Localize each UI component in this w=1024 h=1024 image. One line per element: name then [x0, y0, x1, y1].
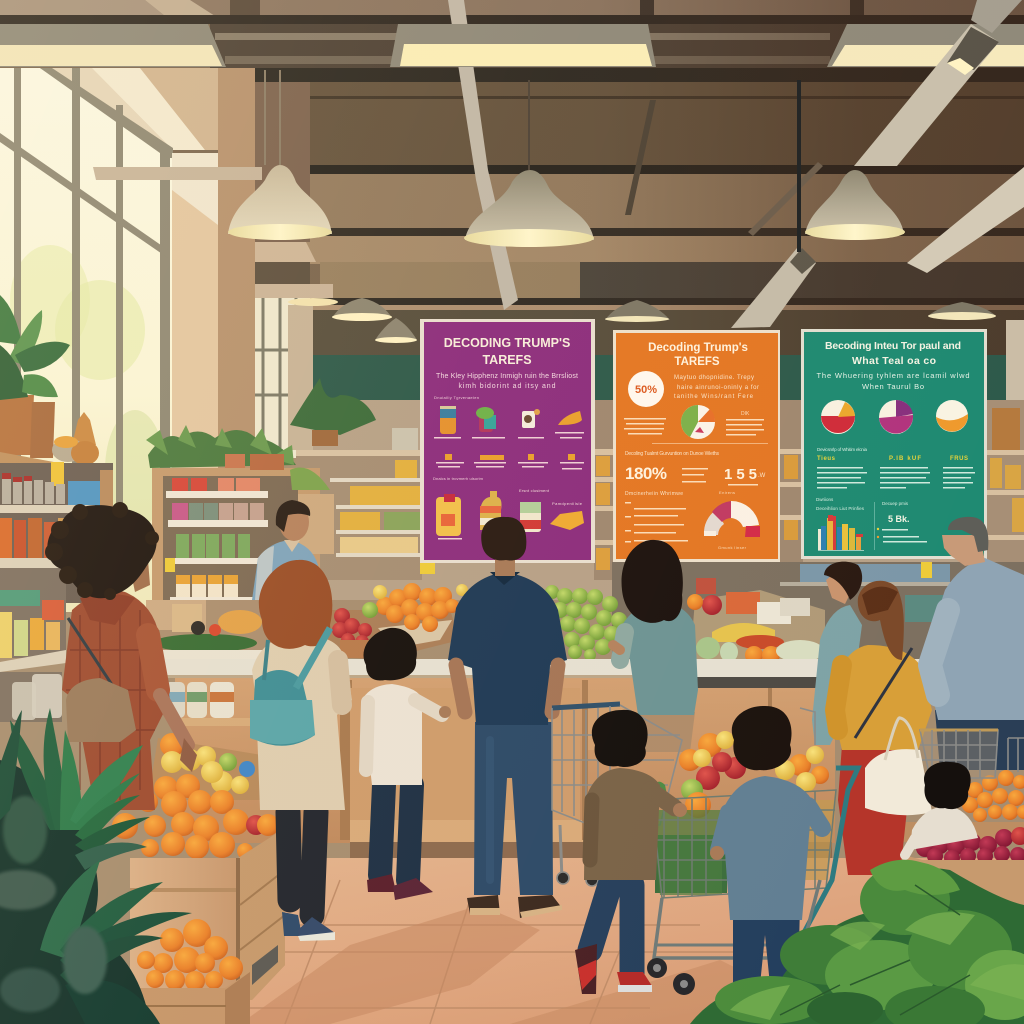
poster: purple tariffs: Ersnt clusiment	[519, 488, 550, 493]
person: small boy in white sweater	[362, 628, 451, 900]
poster: green tariffs: FRUS	[950, 456, 968, 462]
back clerk	[252, 500, 322, 600]
poster: green tariffs: Devicsnrlp of Whitim elcnia	[817, 447, 867, 452]
crate: lower oranges	[100, 919, 250, 1024]
poster: orange tariffs: 50%	[635, 384, 657, 396]
person: child in brown jacket	[575, 710, 687, 994]
person: man in navy polo	[448, 517, 567, 918]
left window wall	[0, 68, 333, 612]
poster: green tariffs: What Teal oa co	[852, 355, 936, 367]
poster: purple tariffs: Dnalcs in trovmerh ulsorim	[433, 476, 484, 481]
poster: purple tariffs: kimh bidorint ad itsy and	[458, 383, 556, 390]
pendant lamps	[228, 70, 996, 343]
foreground leafy plant right	[690, 860, 1024, 1024]
person: child in blue shirt	[710, 706, 822, 985]
poster: orange tariffs: Maytuo dhopnidine. Trepy	[674, 375, 754, 381]
poster: green tariffs: The Whuering tyhlem are lcamil wlwd	[816, 371, 970, 380]
back shelves with products	[296, 320, 1024, 662]
person: older man in gray-blue shirt	[922, 517, 1024, 770]
person: toddler at right crate	[905, 762, 978, 855]
poster: orange tariffs: DIK	[741, 411, 750, 417]
ceiling and back wall	[0, 0, 1024, 600]
poster: orange tariffs: 180%	[625, 464, 667, 483]
poster: orange tariffs: 155	[724, 466, 757, 483]
ceiling strip lights	[0, 0, 1024, 328]
produce on back counter	[146, 578, 960, 664]
left wall plant and shelves	[0, 295, 113, 722]
horizontal beam by window	[93, 167, 262, 180]
poster: purple tariffs: Dnuiailiy Tgrvenaeien	[434, 395, 479, 400]
poster: orange tariffs: Decoding Trump's	[648, 342, 748, 354]
center-left shelf unit	[146, 378, 376, 603]
person: woman in teal top	[812, 562, 862, 745]
poster: green tariffs: Deceihlion Liut Prinfies	[816, 506, 865, 511]
poster: purple tariffs: Pamdpeniilsle	[552, 501, 583, 506]
poster: green tariffs: Dwriions	[816, 497, 834, 502]
crate: yellow apples and oranges	[112, 733, 285, 1000]
poster: orange tariffs: TAREFS	[674, 356, 720, 368]
floor	[130, 842, 1024, 1024]
poster: purple tariffs: The Kley Hipphenz Inmigh ruin the Brrsliost	[436, 373, 578, 380]
poster: green tariffs: 5 Bk.	[888, 514, 910, 524]
poster: orange tariffs: haire ainrunoi-oninly a for	[677, 385, 759, 391]
shopping cart: right side	[800, 708, 1024, 778]
person: red-haired woman with teal backpack	[250, 560, 352, 941]
poster: orange tariffs: Decoling Tualrnt Gurvuntion on Dunoe Wieths	[625, 451, 720, 457]
poster: green tariffs: P.IB kUF	[889, 456, 921, 462]
person: woman with long dark hair	[613, 540, 698, 752]
poster: green tariffs	[801, 329, 987, 559]
shopping cart with produce	[647, 731, 858, 995]
poster: orange tariffs: tanithe Wins/rant Fere	[674, 394, 754, 400]
crate: right red apples	[875, 770, 1024, 935]
poster: green tariffs: Becoding Inteu Tor paul and	[825, 340, 961, 352]
shopping cart: behind	[552, 704, 682, 886]
poster: orange tariffs: Enirens	[719, 490, 735, 495]
poster: orange tariffs: .W	[758, 473, 766, 479]
poster: purple tariffs: TAREFS	[482, 353, 532, 367]
poster: orange tariffs	[613, 330, 780, 562]
poster: purple tariffs: DECODING TRUMP'S	[444, 336, 570, 350]
poster: purple tariffs	[420, 319, 595, 563]
foreground tropical plant left	[0, 708, 192, 1024]
poster: green tariffs: When Taurul Bo	[862, 382, 924, 391]
poster: orange tariffs: Gmunk linser	[718, 545, 747, 550]
person: curly-haired woman in plaid	[45, 502, 197, 810]
poster: green tariffs: Decuep pmis	[882, 501, 909, 506]
person: woman in yellow top with ponytail	[830, 581, 932, 875]
fruit crates	[100, 733, 1024, 1024]
poster: orange tariffs: Dmcinerheiin Whrimwe	[625, 491, 683, 497]
posters	[420, 319, 987, 563]
poster: green tariffs: Tieus	[817, 456, 836, 462]
wooden counter	[155, 659, 1024, 843]
